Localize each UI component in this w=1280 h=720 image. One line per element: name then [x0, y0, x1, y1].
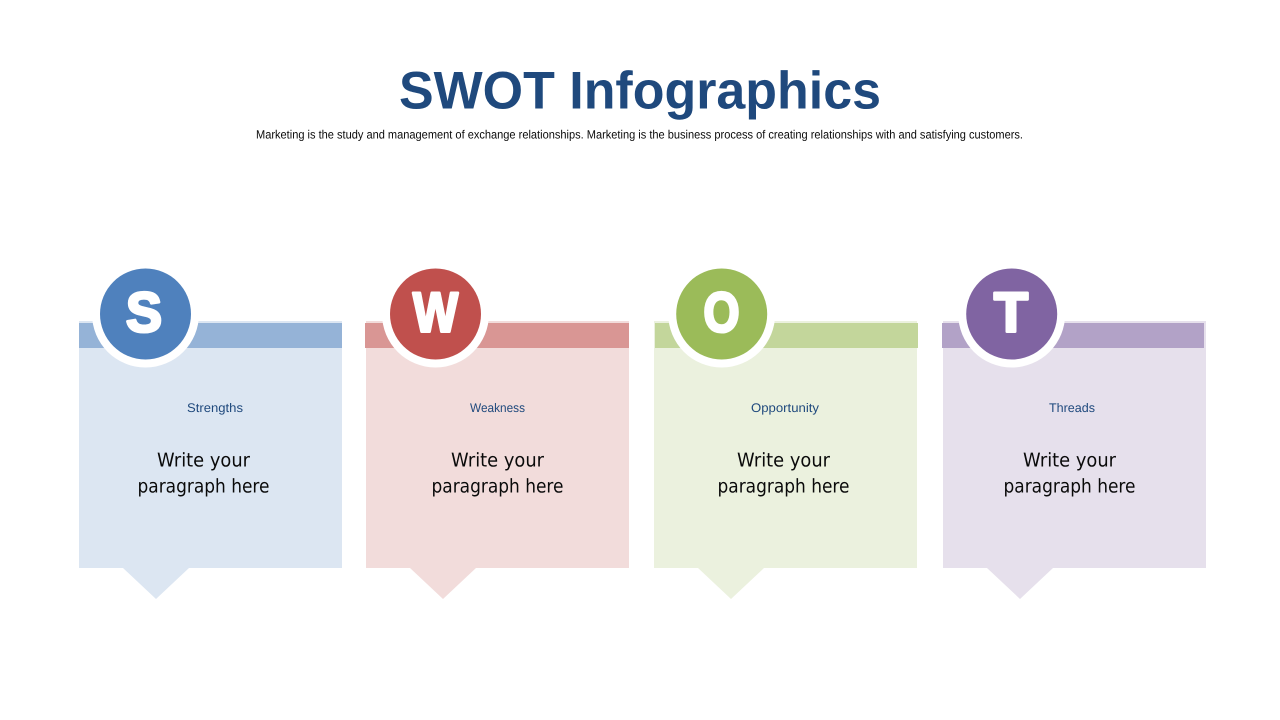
subtitle: Marketing is the study and management of exchange relationships. Marketing is the business process of creating relationships with and satisfying customers.	[256, 128, 1023, 142]
icon: W badge: W	[413, 280, 458, 344]
paragraph	[718, 450, 850, 498]
panel: weakness	[365, 260, 629, 599]
icon: S badge	[92, 260, 199, 368]
header band	[655, 323, 918, 348]
icon: W badge	[382, 260, 489, 368]
label: Weakness	[470, 401, 525, 415]
paragraph: Write your	[1023, 450, 1116, 472]
paragraph	[432, 450, 564, 498]
title: SWOT Infographics	[399, 62, 881, 120]
card body	[943, 321, 1206, 599]
icon: T badge	[958, 260, 1065, 368]
card body	[79, 321, 342, 599]
paragraph: Write your	[737, 450, 830, 472]
header band	[365, 323, 629, 348]
card body	[654, 321, 917, 599]
icon: O badge	[668, 260, 775, 368]
label: Strengths	[187, 401, 243, 415]
icon: O badge: O	[704, 280, 740, 344]
label: Opportunity	[751, 401, 820, 415]
paragraph: Write your	[451, 450, 544, 472]
label: Threads	[1049, 401, 1095, 415]
panel: strengths	[79, 260, 342, 599]
paragraph: paragraph here	[1004, 476, 1136, 498]
card body	[366, 321, 629, 599]
header band	[79, 323, 342, 348]
panel: threads	[942, 260, 1206, 599]
header band	[942, 323, 1204, 348]
paragraph	[138, 450, 270, 498]
icon: T badge: T	[994, 280, 1028, 344]
paragraph: paragraph here	[718, 476, 850, 498]
paragraph	[1004, 450, 1136, 498]
paragraph: Write your	[157, 450, 250, 472]
panel: opportunity	[654, 260, 918, 599]
paragraph: paragraph here	[138, 476, 270, 498]
paragraph: paragraph here	[432, 476, 564, 498]
icon: S badge: S	[126, 280, 162, 344]
